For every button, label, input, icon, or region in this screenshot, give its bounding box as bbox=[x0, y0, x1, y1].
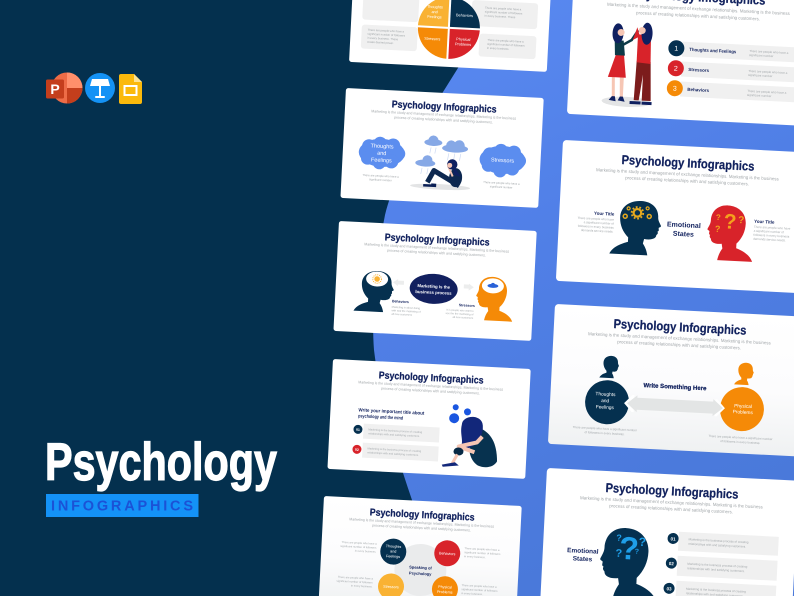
row 3 bbox=[666, 80, 794, 104]
subtitle: Marketing is the study and management of exchange relationships. Marketing is the business bbox=[596, 167, 780, 182]
left caption: of followers in every business. bbox=[584, 430, 625, 436]
node captions: significant number of followers bbox=[340, 544, 377, 550]
behaviors text: Behaviors bbox=[392, 299, 409, 304]
slide: important title with woman bbox=[327, 359, 531, 479]
subtitle: Marketing is the study and management of exchange relationships. Marketing is the business bbox=[607, 2, 791, 16]
right woman bbox=[629, 22, 656, 105]
subtitle bbox=[371, 109, 516, 126]
pie chart: Physical bbox=[456, 37, 471, 42]
panel captions: in every business. These bbox=[484, 14, 516, 19]
subtitle: process of creating relationships with and satisfying customers. bbox=[617, 339, 741, 350]
row 03: 03 bbox=[666, 586, 672, 591]
node: behaviors bbox=[434, 540, 461, 567]
pie chart: Feelings bbox=[427, 15, 442, 19]
head: blue question marks: ? bbox=[635, 549, 639, 556]
row 01: relationships with and satisfying customers. bbox=[688, 542, 746, 549]
row 01: Marketing is the business process of creating bbox=[688, 537, 749, 544]
left text: demands service needs. bbox=[581, 228, 614, 234]
node captions: There are people who have a bbox=[338, 575, 373, 581]
main title: Psychology bbox=[45, 433, 277, 492]
right caption bbox=[708, 434, 773, 446]
label: emotional states: Emotional bbox=[567, 547, 599, 556]
behaviors text bbox=[391, 299, 421, 317]
row 1: 1 bbox=[674, 46, 679, 53]
label: emotional states bbox=[567, 547, 599, 564]
subtitle bbox=[588, 331, 772, 352]
icon: Google Slides bbox=[119, 74, 142, 104]
right text: demands service needs. bbox=[753, 237, 786, 242]
row 01: Marketing is the business process of creating bbox=[368, 427, 423, 434]
node captions: There are people who have a bbox=[462, 583, 497, 589]
node: stressors bbox=[377, 573, 405, 596]
subtitle: process of creating relationships with and satisfying customers. bbox=[609, 503, 733, 514]
icon: PowerPoint: P bbox=[50, 81, 60, 97]
pie chart: Problems bbox=[455, 42, 471, 47]
cloud: thoughts and feelings: Feelings bbox=[371, 157, 392, 164]
node captions: in every business. bbox=[355, 549, 377, 554]
head: blue question marks: ? bbox=[618, 530, 640, 567]
cloud: stressors bbox=[479, 143, 527, 179]
subtitle: Marketing is the study and management of exchange relationships. Marketing is the business bbox=[349, 517, 494, 529]
panel captions bbox=[367, 0, 527, 52]
head: question marks: ? bbox=[723, 210, 737, 234]
cloud: thoughts and feelings: and bbox=[377, 151, 386, 157]
node captions: There are people who have a bbox=[342, 540, 377, 546]
cloud captions: There are people who have a bbox=[362, 173, 399, 179]
left text: a significant number of bbox=[584, 220, 614, 226]
subtitle bbox=[349, 517, 494, 534]
row 1: There are people who have a bbox=[749, 49, 789, 55]
orange circle bbox=[719, 386, 765, 432]
subtitle bbox=[596, 167, 780, 188]
cloud: thoughts and feelings bbox=[358, 136, 406, 171]
row 02: Marketing is the business process of creating bbox=[687, 562, 748, 569]
subtitle: process of creating relationships with and satisfying customers. bbox=[372, 523, 471, 532]
sad woman figure bbox=[410, 157, 472, 191]
rain clouds bbox=[415, 135, 469, 176]
heading: Write your important title about bbox=[358, 407, 425, 416]
heading: psychology and the mind bbox=[358, 413, 403, 421]
panel captions: There are people who have a bbox=[487, 38, 524, 44]
slide: speaking of psychology bbox=[318, 496, 522, 596]
subtitle: Marketing is the study and management of exchange relationships. Marketing is the business bbox=[580, 495, 764, 510]
app icons bbox=[46, 72, 142, 104]
node: physical problems bbox=[431, 576, 459, 596]
arrows bbox=[393, 279, 474, 291]
title: Psychology Infographics bbox=[605, 480, 739, 502]
head: question marks: ? bbox=[738, 215, 744, 226]
row 03 bbox=[663, 580, 776, 596]
oval bbox=[409, 273, 458, 305]
stressors text: Stressors bbox=[459, 303, 475, 308]
badge: infographics: INFOGRAPHICS bbox=[51, 498, 193, 514]
node: behaviors: Behaviors bbox=[439, 551, 456, 556]
node: thoughts and feelings bbox=[380, 538, 407, 565]
left caption bbox=[572, 425, 637, 437]
cloud captions: There are people who have a bbox=[483, 180, 520, 186]
row 02: 02 bbox=[669, 561, 674, 566]
node: thoughts and feelings: and bbox=[390, 549, 396, 554]
row 1: significant number bbox=[749, 53, 774, 58]
behaviors text: Marketing is about doing bbox=[392, 305, 421, 310]
stressors text bbox=[445, 303, 475, 320]
subtitle: process of creating relationships with and satisfying customers. bbox=[394, 115, 493, 124]
node captions: significant number of followers bbox=[336, 579, 373, 585]
row 02 bbox=[665, 555, 778, 581]
illustration: two women bbox=[601, 21, 656, 108]
row 2: 2 bbox=[674, 66, 678, 73]
thought dots bbox=[449, 404, 471, 424]
row 2: There are people who have a bbox=[748, 69, 788, 75]
label: emotional states: States bbox=[673, 231, 694, 239]
head: question marks: ? bbox=[716, 213, 721, 222]
head: orange with cloud bbox=[475, 276, 514, 322]
node: thoughts and feelings: Feelings bbox=[386, 554, 400, 559]
row 01: relationships with and satisfying customers. bbox=[368, 431, 420, 438]
node: thoughts and feelings: Thoughts bbox=[386, 544, 401, 549]
node captions: significant number of followers bbox=[461, 587, 498, 593]
slide: clouds bbox=[340, 88, 544, 208]
head: blue question marks bbox=[598, 527, 660, 596]
subtitle: Marketing is the study and management of exchange relationships. Marketing is the business bbox=[358, 380, 503, 392]
title: Psychology Infographics bbox=[391, 99, 497, 116]
node captions: in every business. bbox=[351, 583, 373, 589]
circle label: thoughts and feelings: and bbox=[601, 398, 610, 404]
pie chart: Stressors bbox=[424, 37, 440, 41]
navy head bbox=[599, 355, 620, 379]
heading bbox=[358, 407, 425, 422]
panel captions: There are people who have a bbox=[368, 28, 405, 34]
node: physical problems: Physical bbox=[438, 585, 452, 590]
left caption: There are people who have a significant number bbox=[573, 425, 637, 432]
cloud captions bbox=[362, 173, 520, 190]
head: blue question marks: ? bbox=[638, 535, 646, 549]
right text: Your Title bbox=[754, 219, 775, 225]
subtitle: process of creating relationships with and satisfying customers. bbox=[381, 386, 480, 395]
row 02: relationships with and satisfying customers. bbox=[687, 566, 745, 573]
row 3: Behaviors bbox=[687, 87, 710, 93]
subtitle bbox=[580, 495, 764, 516]
node: stressors: Stressors bbox=[383, 585, 399, 589]
title: Psychology Infographics bbox=[369, 507, 475, 524]
behaviors text: with and the marketing of bbox=[391, 308, 421, 314]
panel captions: in every business. These bbox=[367, 36, 399, 41]
subtitle: process of creating relationships with and satisfying customers. bbox=[636, 10, 760, 21]
subtitle bbox=[364, 242, 509, 259]
title: Psychology Infographics bbox=[384, 232, 490, 249]
row 01: 01 bbox=[356, 428, 360, 432]
center circle bbox=[393, 543, 448, 596]
title: Psychology Infographics bbox=[621, 152, 755, 174]
text panels bbox=[361, 0, 538, 59]
circle label: physical problems bbox=[732, 403, 754, 416]
subtitle: Marketing is the study and management of exchange relationships. Marketing is the business bbox=[371, 109, 516, 121]
node captions: in every business. bbox=[464, 554, 486, 559]
circle label: physical problems: Problems bbox=[732, 409, 754, 416]
left text: Your Title bbox=[594, 211, 615, 217]
pie chart: Behaviors bbox=[456, 13, 473, 18]
row 02 bbox=[352, 442, 439, 461]
row 01 bbox=[667, 531, 779, 556]
label: write something here: Write Something Here bbox=[643, 383, 707, 392]
subtitle: Marketing is the study and management of exchange relationships. Marketing is the business bbox=[364, 242, 509, 254]
slide: write something here bbox=[548, 304, 794, 457]
title: Psychology Infographics bbox=[378, 370, 484, 387]
stressors text: use the the marketing of bbox=[446, 311, 474, 316]
oval: business process bbox=[415, 289, 452, 296]
title: Psychology Infographics bbox=[613, 316, 747, 338]
node: physical problems: Problems bbox=[437, 590, 453, 595]
right text: There are people who have bbox=[754, 225, 791, 231]
node captions: There are people who have a bbox=[464, 546, 500, 552]
row 03: Marketing is the business process of creating bbox=[686, 587, 746, 594]
row 3: significant number bbox=[747, 93, 772, 98]
center circle: Speaking of bbox=[409, 564, 433, 571]
head: blue question marks: ? bbox=[616, 533, 622, 543]
head: question marks bbox=[706, 204, 755, 262]
stressors text: all new customers bbox=[452, 315, 474, 320]
panel captions: significant number of followers bbox=[487, 42, 525, 48]
row 2 bbox=[667, 60, 794, 84]
right text: followers in every business bbox=[753, 233, 790, 239]
panel captions: significant number of followers bbox=[485, 10, 523, 16]
slide: emotional states list bbox=[540, 468, 794, 596]
subtitle: Marketing is the study and management of exchange relationships. Marketing is the business bbox=[588, 331, 772, 346]
node captions: significant number of followers bbox=[464, 550, 501, 556]
row 02: relationships with and satisfying customers. bbox=[367, 450, 419, 457]
behaviors text: all new customers bbox=[391, 312, 413, 317]
pie chart: and bbox=[431, 10, 438, 14]
pie chart bbox=[416, 0, 481, 60]
stressors text: It is people who want to bbox=[446, 308, 474, 313]
slide: emotional states bbox=[556, 140, 794, 294]
circle label: physical problems: Physical bbox=[734, 403, 752, 410]
row 01 bbox=[353, 423, 440, 442]
navy circle bbox=[584, 379, 630, 425]
cloud: thoughts and feelings: Thoughts bbox=[370, 143, 394, 150]
right text: a significant number of bbox=[754, 229, 784, 234]
icon: Keynote bbox=[85, 73, 115, 103]
background: blue shape bbox=[373, 0, 794, 596]
row 1: Thoughts and Feelings bbox=[689, 47, 737, 54]
oval: Marketing is the bbox=[417, 283, 451, 290]
row 3: 3 bbox=[673, 86, 677, 93]
label: emotional states bbox=[666, 221, 701, 239]
left woman bbox=[607, 23, 639, 102]
row 1 bbox=[668, 40, 794, 64]
cloud: stressors: Stressors bbox=[491, 157, 515, 165]
orange head bbox=[734, 362, 754, 385]
subtitle bbox=[607, 2, 791, 23]
cloud captions: significant number bbox=[369, 177, 392, 182]
head: question marks: ? bbox=[715, 224, 721, 234]
circle label: thoughts and feelings: Thoughts bbox=[595, 391, 616, 398]
crouching woman bbox=[442, 415, 499, 469]
row 01: 01 bbox=[670, 536, 676, 542]
panel captions: in every business. bbox=[487, 46, 510, 51]
panel captions: create desired power. bbox=[367, 40, 394, 45]
label: emotional states: States bbox=[572, 555, 593, 563]
center circle: Psychology bbox=[409, 570, 432, 577]
right caption: There are people who have a significant number bbox=[708, 434, 773, 441]
circle label: thoughts and feelings: Feelings bbox=[596, 404, 615, 411]
right text bbox=[753, 219, 791, 243]
row 2: significant number bbox=[748, 73, 773, 78]
subtitle: process of creating relationships with and satisfying customers. bbox=[387, 248, 486, 257]
panel captions: There are people who have a bbox=[485, 6, 522, 12]
right caption: of followers in every business. bbox=[720, 439, 760, 445]
slide: two women and numbered list bbox=[567, 0, 794, 127]
panel captions: significant number of followers bbox=[367, 32, 406, 38]
left text bbox=[577, 210, 615, 234]
row 3: There are people who have a bbox=[747, 89, 787, 95]
left text: There are people who have bbox=[577, 216, 614, 222]
node captions bbox=[336, 540, 501, 596]
row 02: Marketing is the business process of creating bbox=[367, 446, 422, 453]
row 02: 02 bbox=[355, 448, 359, 452]
double arrow bbox=[624, 395, 725, 417]
subtitle: process of creating relationships with and satisfying customers. bbox=[625, 175, 749, 186]
pie chart: Thoughts bbox=[427, 5, 443, 10]
head: blue question marks: ? bbox=[615, 548, 623, 560]
label: emotional states: Emotional bbox=[667, 221, 701, 230]
subtitle bbox=[358, 380, 503, 397]
circle label: thoughts and feelings bbox=[595, 391, 616, 411]
slide: marketing oval and heads bbox=[333, 221, 537, 341]
head: navy with sun bbox=[353, 270, 395, 313]
slide: pie quadrants bbox=[349, 0, 552, 72]
head: gears bbox=[609, 200, 662, 256]
badge: infographics bbox=[46, 494, 198, 517]
row 2: Stressors bbox=[688, 67, 710, 73]
cloud captions: significant number bbox=[490, 184, 513, 190]
left text: followers in every business bbox=[578, 224, 614, 230]
